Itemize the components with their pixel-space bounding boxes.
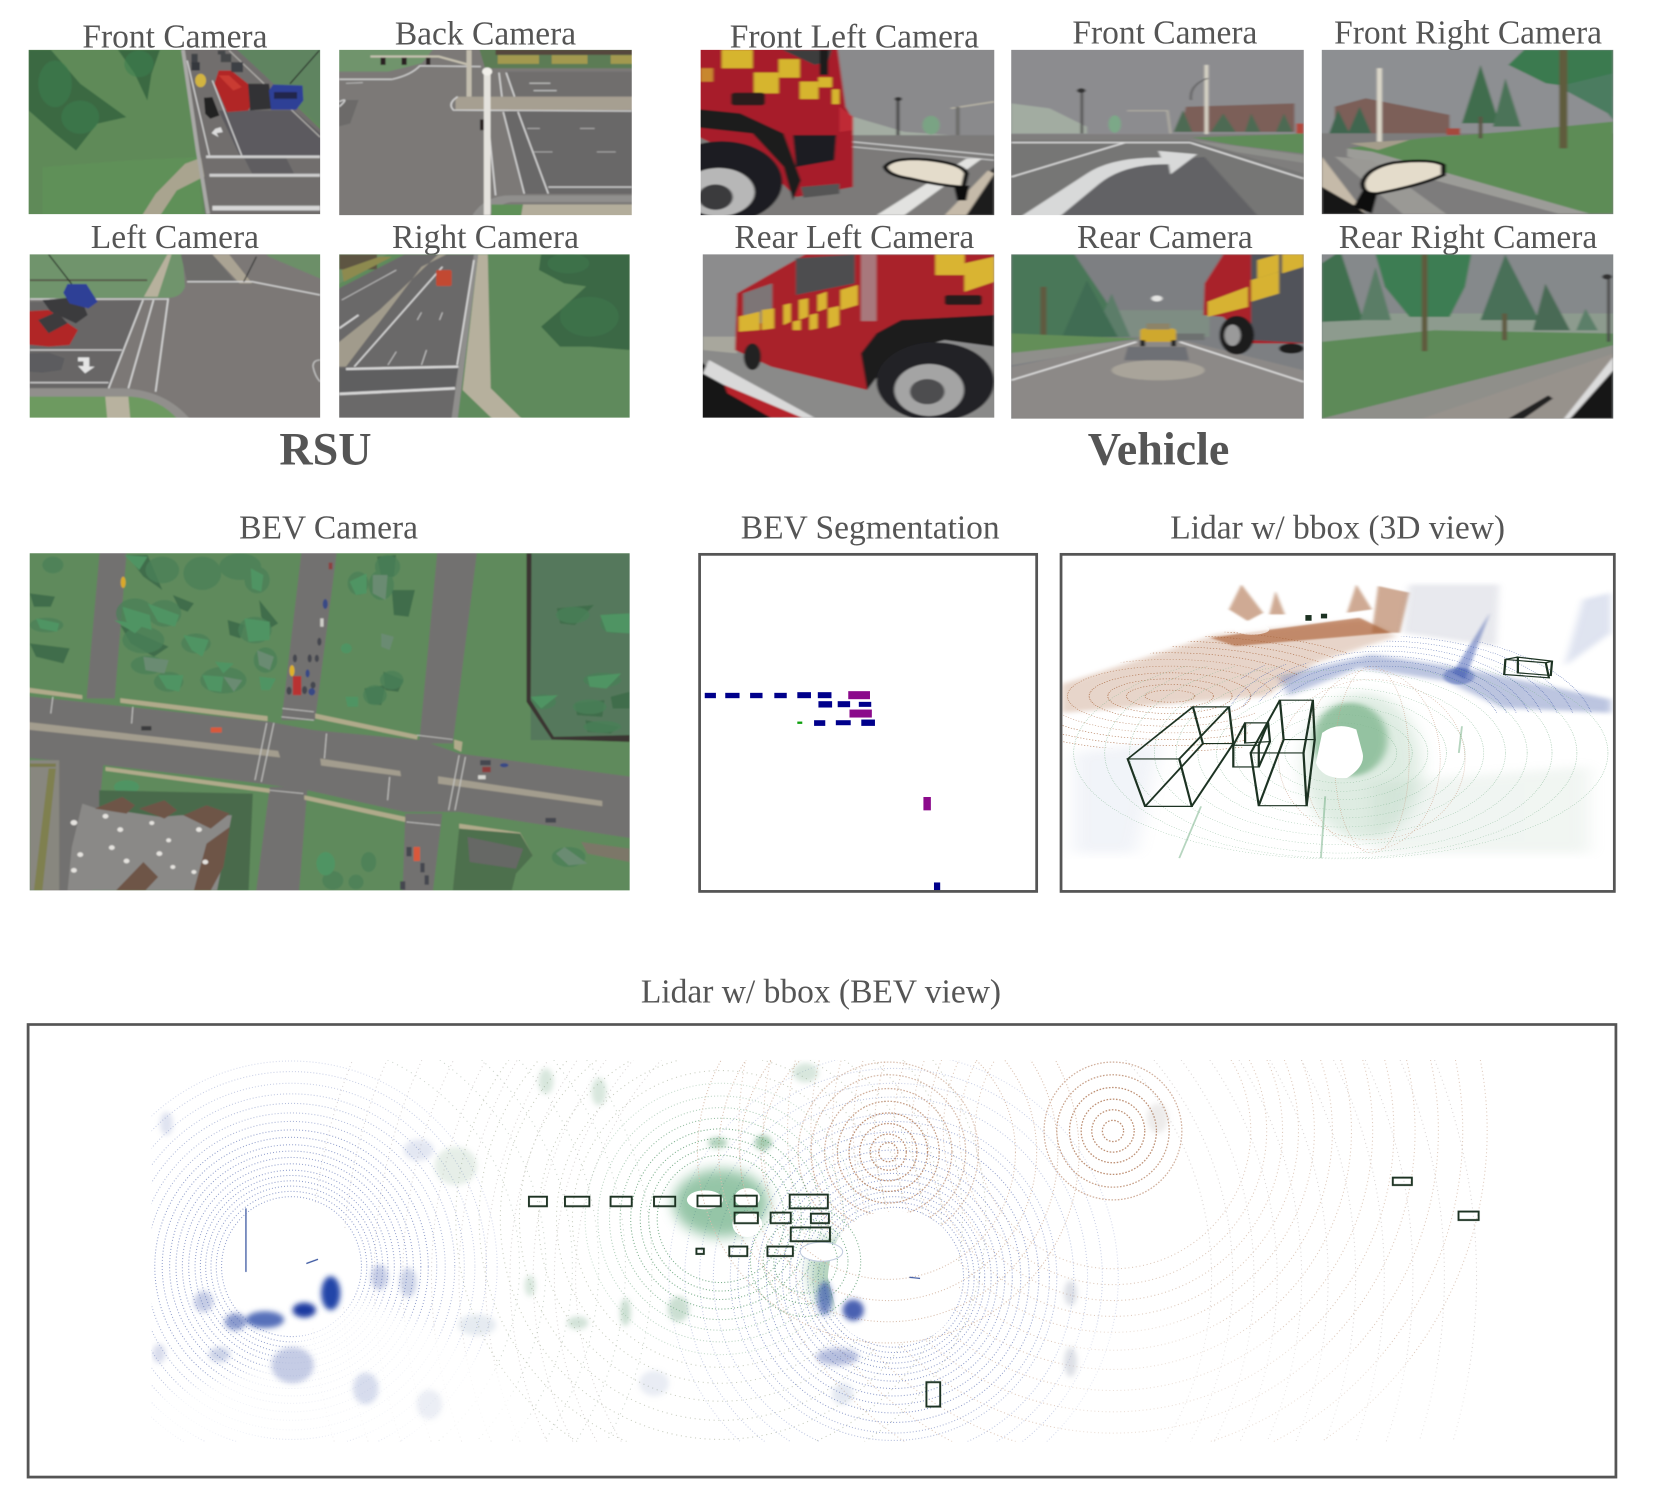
panel: Vehicle cameras xyxy=(661,14,1632,474)
dark blue blobs xyxy=(153,1063,1168,1419)
label: Vehicle Front Right Camera: Front Right Camera xyxy=(1334,14,1602,51)
image: vehicle rear left camera view xyxy=(702,254,994,418)
rings: brown xyxy=(1062,632,1346,752)
heading: Vehicle: Vehicle xyxy=(1088,423,1229,474)
second vehicle blue rings xyxy=(669,1052,1118,1442)
far tan rings xyxy=(739,1060,1487,1442)
panel: BEV Camera xyxy=(17,509,644,900)
cars xyxy=(293,676,301,695)
image: vehicle front left camera view xyxy=(700,50,994,216)
chart: segmentation map xyxy=(704,691,940,890)
label: Vehicle Rear Camera: Rear Camera xyxy=(1077,219,1253,256)
label: Lidar BEV view: Lidar w/ bbox (BEV view) xyxy=(641,974,1001,1011)
panel: BEV Segmentation xyxy=(699,509,1038,892)
image: vehicle rear camera view xyxy=(1011,254,1304,419)
heading: RSU: RSU xyxy=(279,423,372,474)
image: RSU left camera view xyxy=(30,254,320,418)
chart: BEV lidar point cloud xyxy=(152,1060,1488,1442)
label: RSU Front Camera: Front Camera xyxy=(82,19,268,56)
tan rings inside vehicle void xyxy=(696,1060,1080,1344)
bounding boxes xyxy=(1128,657,1552,806)
ego vehicle void xyxy=(1316,726,1363,778)
ego vehicle voids xyxy=(310,1206,345,1329)
frame xyxy=(700,554,1037,891)
image: RSU right camera view xyxy=(339,254,630,418)
point density washes xyxy=(1061,619,1397,713)
label: RSU Right Camera: Right Camera xyxy=(392,219,579,256)
left RSU rings xyxy=(152,1060,498,1442)
image: vehicle front camera view xyxy=(1011,50,1304,216)
label: RSU Back Camera: Back Camera xyxy=(395,16,576,53)
chart: 3D lidar point cloud xyxy=(1062,584,1613,860)
label: BEV Camera: BEV Camera xyxy=(239,509,418,546)
label: Vehicle Front Left Camera: Front Left Camera xyxy=(730,19,979,56)
rings: green and tan inner ground xyxy=(1074,647,1608,859)
apartment building xyxy=(99,790,253,890)
trees point clusters xyxy=(1229,584,1409,633)
rings: blue xyxy=(1227,636,1592,713)
bounding boxes xyxy=(529,1178,1479,1407)
frame xyxy=(1061,554,1614,891)
occlusion voids xyxy=(152,1298,541,1442)
right building xyxy=(453,829,533,890)
label: Vehicle Rear Left Camera: Rear Left Camera xyxy=(734,219,974,256)
label: Vehicle Front Camera: Front Camera xyxy=(1072,14,1258,51)
label: BEV Segmentation: BEV Segmentation xyxy=(741,509,1000,546)
image: vehicle rear right camera view xyxy=(1322,254,1614,419)
image: RSU back camera view xyxy=(339,50,632,216)
green density rings xyxy=(673,1169,768,1237)
label: RSU Left Camera: Left Camera xyxy=(91,219,259,256)
panel: Lidar BEV view xyxy=(28,961,1616,1477)
image: vehicle front right camera view xyxy=(1322,50,1614,214)
frame xyxy=(28,1024,1616,1477)
label: Vehicle Rear Right Camera: Rear Right Camera xyxy=(1339,219,1597,256)
trees xyxy=(30,555,630,734)
label: Lidar 3D view: Lidar w/ bbox (3D view) xyxy=(1170,509,1505,546)
panel: Lidar 3D view xyxy=(1060,514,1616,893)
panel: RSU cameras xyxy=(17,16,645,474)
image: overhead camera intersection xyxy=(30,553,630,890)
orange ring centres xyxy=(798,1062,1182,1242)
image: RSU front camera view xyxy=(28,50,320,214)
